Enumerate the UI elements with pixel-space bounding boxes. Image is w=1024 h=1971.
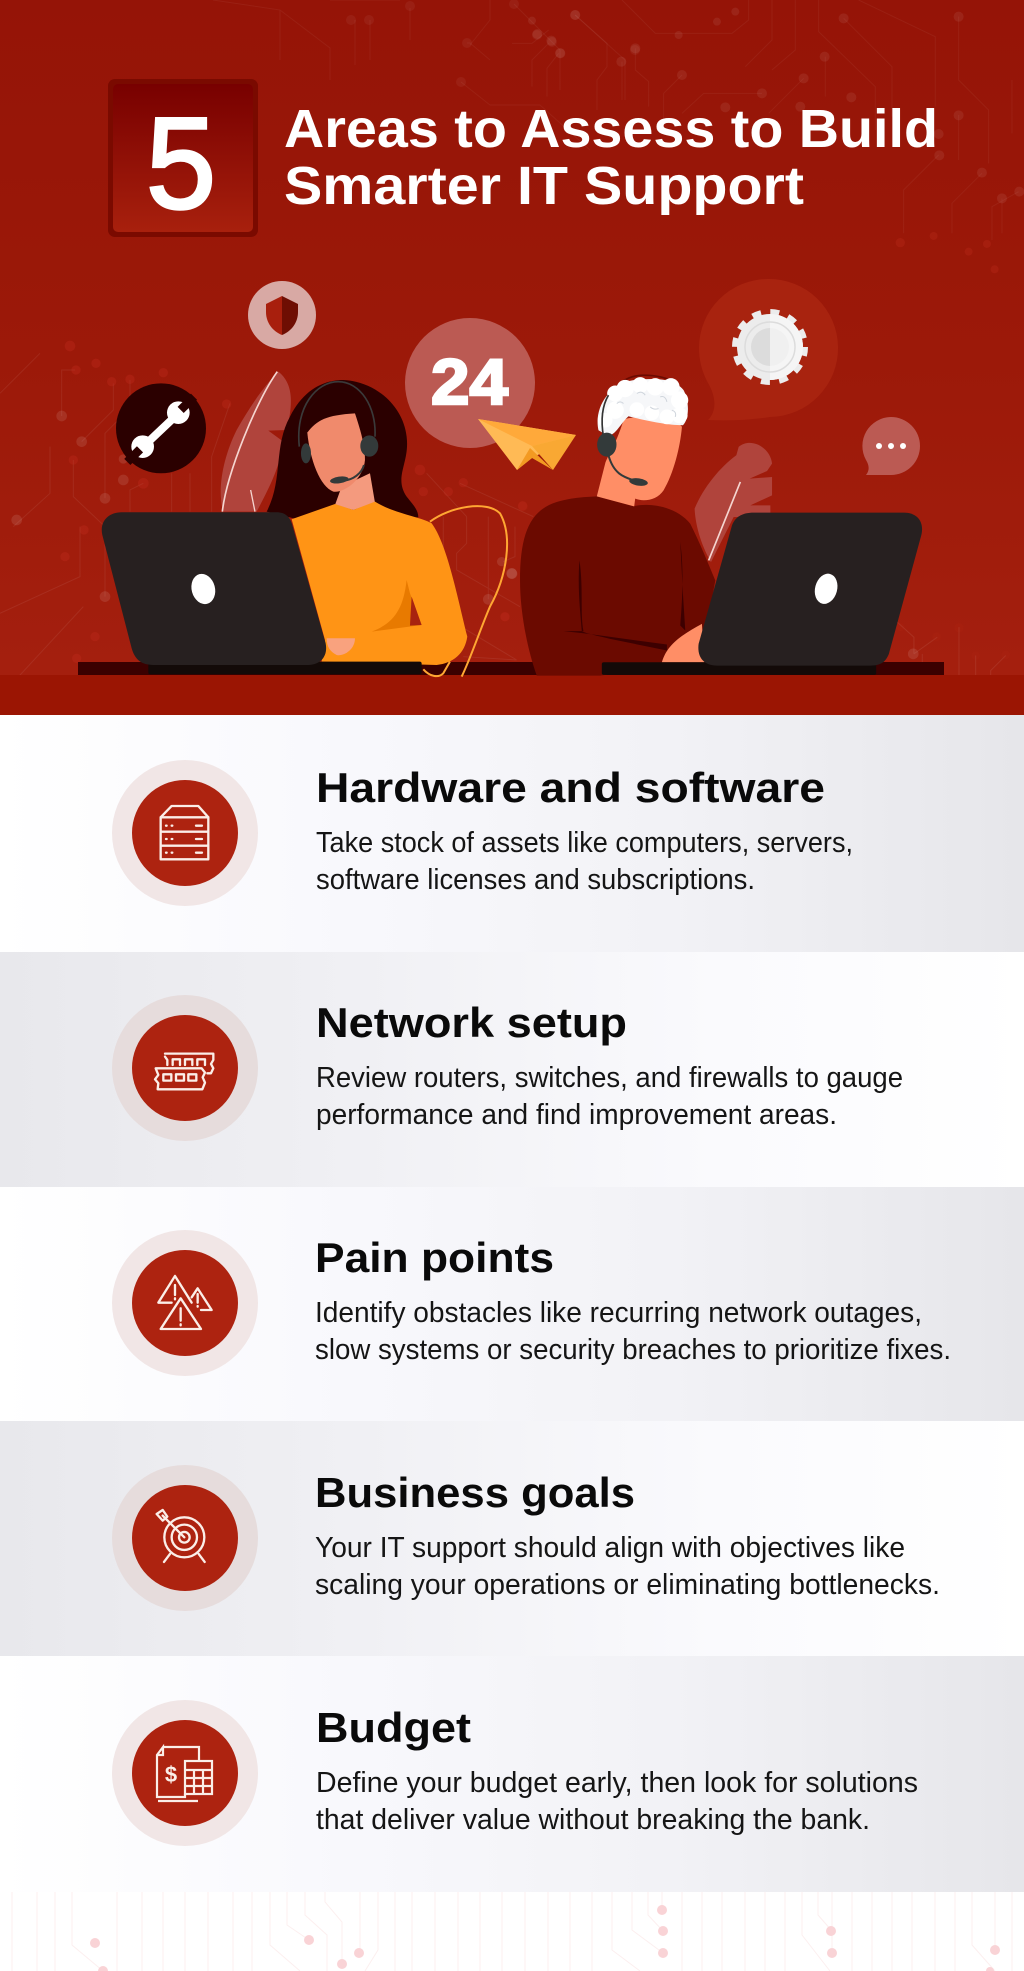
- bottom floor band: [0, 675, 1024, 715]
- heading: Business goals: [315, 1469, 635, 1516]
- description: slow systems or security breaches to prioritize fixes.: [315, 1334, 951, 1366]
- orange headset cord: [423, 506, 507, 677]
- heading: Network setup: [316, 999, 627, 1046]
- icon: invoice and calculator: $: [165, 1762, 177, 1787]
- face: [307, 413, 365, 492]
- number badge 5: [108, 79, 258, 237]
- description: performance and find improvement areas.: [316, 1099, 837, 1131]
- heading: Pain points: [315, 1234, 554, 1281]
- icon: shield badge: [248, 281, 316, 349]
- icon: memory modules: [112, 995, 258, 1141]
- description: Identify obstacles like recurring network outages,: [315, 1297, 922, 1329]
- right keyboard base: [602, 662, 876, 675]
- icon: invoice and calculator: [112, 1700, 258, 1846]
- icon: server rack: [112, 760, 258, 906]
- description: [316, 1767, 918, 1836]
- title: Smarter IT Support: [284, 156, 804, 216]
- left keyboard base: [148, 662, 422, 674]
- 24 hours badge: [405, 318, 535, 448]
- neck: [335, 473, 375, 510]
- icon: paper plane: [478, 419, 576, 470]
- headset: [597, 395, 648, 487]
- headset: [299, 382, 378, 485]
- description: that deliver value without breaking the bank.: [316, 1804, 870, 1836]
- orange sweater: [292, 502, 467, 665]
- description: [316, 827, 853, 896]
- item row: hardware and software: [0, 715, 1024, 952]
- left laptop: [102, 512, 326, 665]
- heading: Hardware and software: [316, 764, 825, 811]
- man agent: [520, 375, 922, 676]
- hand: [327, 638, 355, 655]
- maroon sweater: [520, 496, 715, 676]
- description: software licenses and subscriptions.: [316, 864, 755, 896]
- heading: Budget: [316, 1704, 471, 1751]
- gear speech bubble: [699, 279, 838, 420]
- description: [315, 1297, 951, 1366]
- footer circuit pattern: [0, 1892, 1024, 1971]
- white curly hair: [598, 377, 688, 435]
- right laptop: [698, 513, 922, 666]
- right laptop logo: [812, 571, 841, 606]
- description: [316, 1062, 903, 1131]
- item row: pain points: [0, 1187, 1024, 1421]
- description: [315, 1532, 940, 1601]
- desk: [78, 662, 944, 675]
- hero panel: [0, 0, 1024, 715]
- hair: [267, 380, 418, 518]
- 24 hours badge: 24: [431, 346, 508, 418]
- item row: network setup: [0, 952, 1024, 1187]
- icon: warning triangles: [112, 1230, 258, 1376]
- description: Review routers, switches, and firewalls to gauge: [316, 1062, 903, 1094]
- description: scaling your operations or eliminating bottlenecks.: [315, 1569, 940, 1601]
- description: Take stock of assets like computers, servers,: [316, 827, 853, 859]
- left laptop logo: [188, 571, 219, 607]
- dots speech bubble: [862, 417, 920, 475]
- hand: [662, 624, 704, 662]
- icon: target with arrow: [112, 1465, 258, 1611]
- number badge 5: 5: [146, 90, 216, 236]
- woman agent: [102, 372, 507, 677]
- right plant leaf: [695, 443, 772, 562]
- item row: business goals: [0, 1421, 1024, 1656]
- item row: budget: [0, 1656, 1024, 1892]
- icon: wrench badge: [116, 383, 206, 473]
- face and neck: [597, 417, 682, 506]
- left plant leaf: [221, 372, 291, 512]
- title: Areas to Assess to Build: [284, 99, 938, 159]
- title: [284, 99, 938, 216]
- description: Your IT support should align with objectives like: [315, 1532, 905, 1564]
- headset band: [603, 375, 675, 437]
- description: Define your budget early, then look for solutions: [316, 1767, 918, 1799]
